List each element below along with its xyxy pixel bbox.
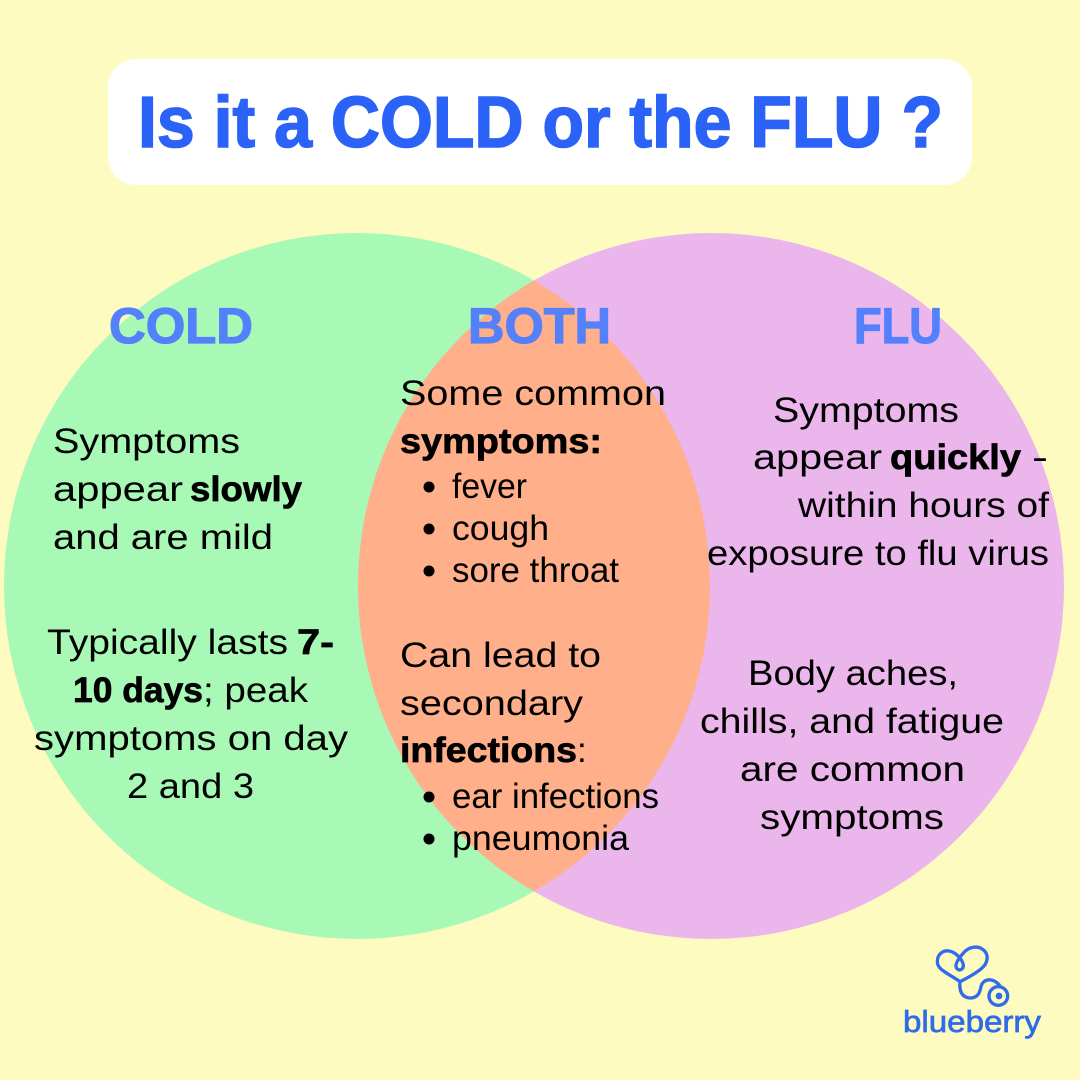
cold duration text: 2 and 3 [127, 767, 254, 806]
both complications text: ear infections [452, 777, 659, 816]
heading: flu: FLU [854, 298, 942, 354]
heading: cold: COLD [109, 298, 253, 354]
flu onset text: - [1032, 438, 1048, 477]
both complications text: secondary [400, 684, 584, 723]
both symptoms text: fever [452, 467, 527, 506]
heading: both: BOTH [468, 298, 611, 354]
title: Is it a COLD or the FLU ? [138, 83, 943, 163]
both symptoms text [400, 374, 666, 590]
flu onset text: exposure to flu virus [707, 534, 1049, 573]
both complications text [400, 636, 659, 858]
both symptoms text: symptoms: [400, 422, 602, 461]
flu symptoms text: Body aches, [748, 654, 958, 693]
cold onset text: slowly [190, 470, 303, 509]
cold duration text: 10 days [73, 671, 203, 710]
icon: stethoscope heart [937, 947, 1008, 1005]
flu onset text: within hours of [797, 486, 1049, 525]
cold duration text [34, 623, 349, 806]
cold onset text [53, 422, 303, 557]
logo: blueberry [903, 947, 1042, 1039]
cold duration text: ; peak [203, 671, 309, 710]
flu onset text: quickly [890, 438, 1022, 477]
cold duration text: Typically lasts [47, 623, 288, 662]
cold onset text: appear [53, 470, 183, 509]
flu onset text [707, 391, 1049, 573]
both symptoms text: cough [452, 509, 549, 548]
logo wordmark: blueberry [903, 1004, 1042, 1039]
cold onset text: Symptoms [53, 422, 240, 461]
flu onset text: Symptoms [773, 391, 959, 430]
cold duration text: symptoms on day [34, 719, 349, 758]
venn diagram [4, 233, 1064, 939]
both complications text: infections [400, 731, 577, 770]
flu symptoms text [700, 654, 1004, 837]
flu symptoms text: symptoms [760, 798, 944, 837]
both complications text: pneumonia [452, 819, 630, 858]
title panel [108, 59, 972, 185]
both complications text: Can lead to [400, 636, 601, 675]
cold duration text: 7- [297, 623, 334, 662]
flu onset text: appear [753, 438, 882, 477]
flu symptoms text: chills, and fatigue [700, 702, 1004, 741]
flu symptoms text: are common [740, 750, 965, 789]
both symptoms text: Some common [400, 374, 666, 413]
both complications text: : [577, 731, 587, 770]
both symptoms text: sore throat [452, 551, 619, 590]
cold onset text: and are mild [53, 518, 273, 557]
